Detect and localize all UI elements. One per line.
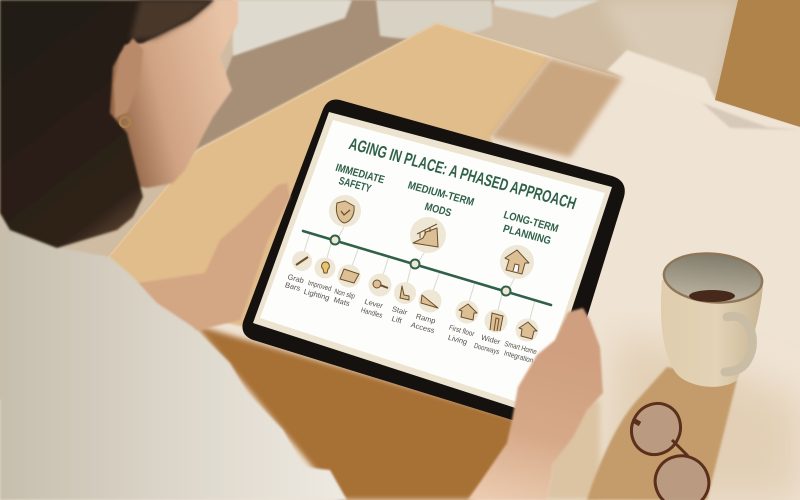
item: wider doorways xyxy=(473,310,508,356)
item: improved lighting: Improved xyxy=(307,278,333,293)
phase 3 heading xyxy=(501,209,560,247)
icon: shield xyxy=(329,195,361,227)
woman: hair xyxy=(0,0,214,248)
item: stair lift xyxy=(391,282,416,325)
item: non-slip mats: Mats xyxy=(333,295,351,308)
item: non-slip mats xyxy=(333,264,360,308)
connector lines xyxy=(304,225,535,319)
phase 1 heading: SAFETY xyxy=(337,175,373,195)
item: wider doorways: Wider xyxy=(480,333,502,347)
phase 1 heading: IMMEDIATE xyxy=(334,162,386,186)
item: ramp access: Ramp xyxy=(415,312,437,326)
item: smart home integration: Smart Home xyxy=(503,339,538,356)
woman: ear xyxy=(114,38,143,118)
tablet body xyxy=(242,100,625,429)
item: smart home integration: Integration xyxy=(503,348,535,365)
item: lever handles xyxy=(360,274,392,320)
title: AGING IN PLACE: A PHASED APPROACH xyxy=(347,134,579,213)
item: improved lighting: Lighting xyxy=(303,287,331,302)
woman: earring xyxy=(120,117,130,127)
phase 2 heading: MODS xyxy=(423,201,453,219)
item: first floor living: First floor xyxy=(448,323,476,338)
item: lever handles: Handles xyxy=(360,305,384,320)
item: grab bars: Bars xyxy=(284,280,302,293)
woman: hair highlight at crown xyxy=(130,0,214,40)
woman: shirt xyxy=(0,217,347,500)
item: grab bars xyxy=(284,251,312,293)
timeline xyxy=(303,231,551,305)
icon: house xyxy=(500,245,534,279)
tablet screen border xyxy=(253,112,612,415)
woman: face xyxy=(105,0,238,188)
woman: right hand holding tablet xyxy=(468,308,603,500)
mug handle xyxy=(725,316,752,372)
mug rim xyxy=(660,248,766,308)
item: grab bars: Grab xyxy=(286,272,305,285)
coffee mug xyxy=(660,248,766,387)
icon: stairs xyxy=(410,217,446,253)
item: first floor living xyxy=(447,300,478,346)
glasses xyxy=(622,394,717,500)
item: improved lighting xyxy=(303,258,336,302)
item: ramp access: Access xyxy=(410,320,436,335)
chair in the top right xyxy=(715,0,800,127)
item: ramp access xyxy=(410,290,442,335)
item: smart home integration xyxy=(503,318,538,365)
coffee xyxy=(689,290,735,302)
item: stair lift: Lift xyxy=(391,314,404,325)
phase 3 heading: LONG-TERM xyxy=(502,209,560,235)
woman: left arm and hand xyxy=(125,183,290,340)
item: wider doorways: Doorways xyxy=(473,341,501,356)
item: non-slip mats: Non slip xyxy=(333,287,356,301)
phase 2 heading: MEDIUM-TERM xyxy=(406,180,476,209)
mug shadow on table xyxy=(587,367,737,500)
item: stair lift: Stair xyxy=(391,304,409,317)
timeline nodes xyxy=(330,236,510,296)
mug body xyxy=(661,280,763,387)
tablet screen xyxy=(260,120,605,407)
item: lever handles: Lever xyxy=(363,297,385,310)
phase 3 heading: PLANNING xyxy=(501,223,552,247)
tablet device xyxy=(242,100,625,429)
item: first floor living: Living xyxy=(447,333,469,346)
